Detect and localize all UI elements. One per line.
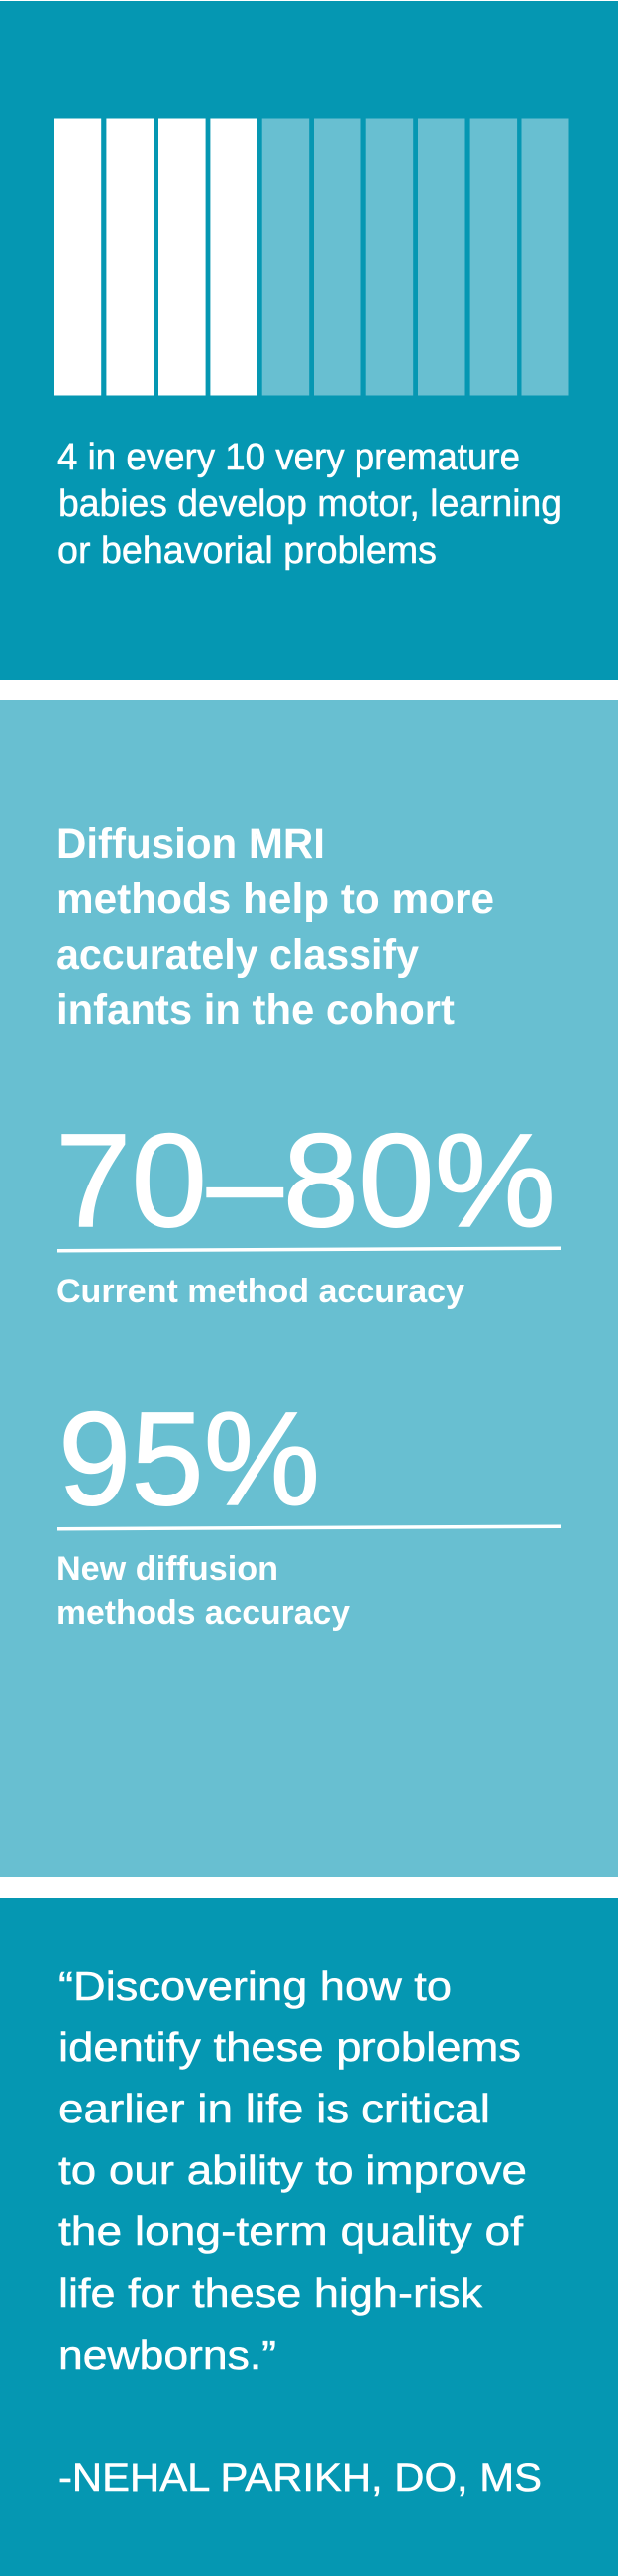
text: quotation: life for these high-risk xyxy=(58,2270,483,2316)
text: quotation xyxy=(58,1963,527,2378)
text: quotation: the long-term quality of xyxy=(58,2209,524,2254)
panel: diffusion MRI accuracy xyxy=(0,700,618,1877)
heading: diffusion MRI methods: Diffusion MRI xyxy=(56,820,325,868)
text: prevalence description xyxy=(57,437,562,571)
text: quotation: identify these problems xyxy=(58,2024,521,2070)
panel: quote xyxy=(0,1898,618,2576)
text: prevalence description: 4 in every 10 very premature xyxy=(57,437,520,478)
attribution: Nehal Parikh: -NEHAL PARIKH, DO, MS xyxy=(58,2456,542,2500)
heading: diffusion MRI methods: accurately classify xyxy=(56,931,419,979)
label: new diffusion methods accuracy: methods accuracy xyxy=(56,1595,350,1632)
label: new diffusion methods accuracy: New diffusion xyxy=(56,1550,278,1588)
text: prevalence description: babies develop motor, learning xyxy=(58,483,562,525)
text: quotation: earlier in life is critical xyxy=(58,2086,490,2131)
heading: diffusion MRI methods xyxy=(56,820,494,1034)
text: quotation: newborns.” xyxy=(58,2332,276,2378)
heading: diffusion MRI methods: methods help to more xyxy=(56,876,494,923)
label: new diffusion methods accuracy xyxy=(56,1550,350,1632)
label: current method accuracy: Current method accuracy xyxy=(56,1273,464,1310)
heading: diffusion MRI methods: infants in the cohort xyxy=(56,986,455,1034)
divider: current method rule xyxy=(57,1246,561,1252)
stat: 70–80%: 70–80% xyxy=(55,1107,556,1255)
text: quotation: to our ability to improve xyxy=(58,2147,527,2193)
text: quotation: “Discovering how to xyxy=(58,1963,452,2009)
chart: 4 in 10 bars xyxy=(54,119,568,396)
panel: prevalence statistic xyxy=(0,1,618,680)
text: prevalence description: or behavorial problems xyxy=(57,530,437,571)
stat: 95%: 95% xyxy=(58,1386,320,1533)
divider: new method rule xyxy=(57,1525,561,1531)
